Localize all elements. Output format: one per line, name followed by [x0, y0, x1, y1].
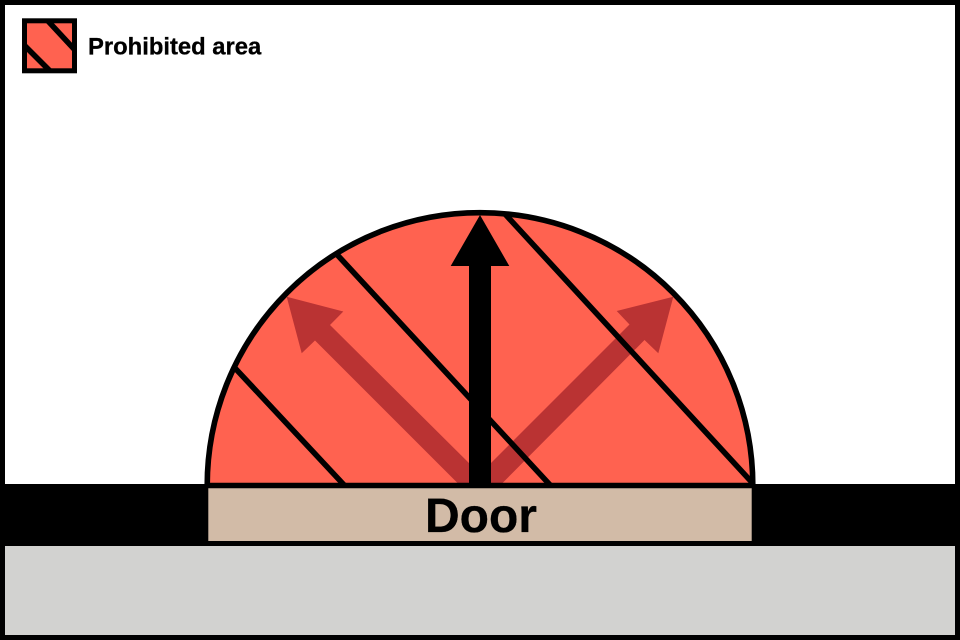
- hatch lines: [234, 214, 752, 486]
- legend: [24, 21, 262, 71]
- legend label: Prohibited area: [88, 33, 262, 60]
- semicircle fill: [208, 213, 752, 486]
- door label: Door: [425, 490, 537, 543]
- legend swatch: [24, 21, 74, 71]
- wall band: [0, 484, 960, 546]
- door: [208, 488, 752, 543]
- semicircle outline: [207, 213, 753, 486]
- prohibited area semicircle: [207, 213, 753, 486]
- door panel: [208, 488, 752, 541]
- right swing arrow: [480, 297, 673, 484]
- left swing arrow: [287, 297, 480, 484]
- floor area: [5, 546, 955, 635]
- forward arrow: [451, 215, 509, 485]
